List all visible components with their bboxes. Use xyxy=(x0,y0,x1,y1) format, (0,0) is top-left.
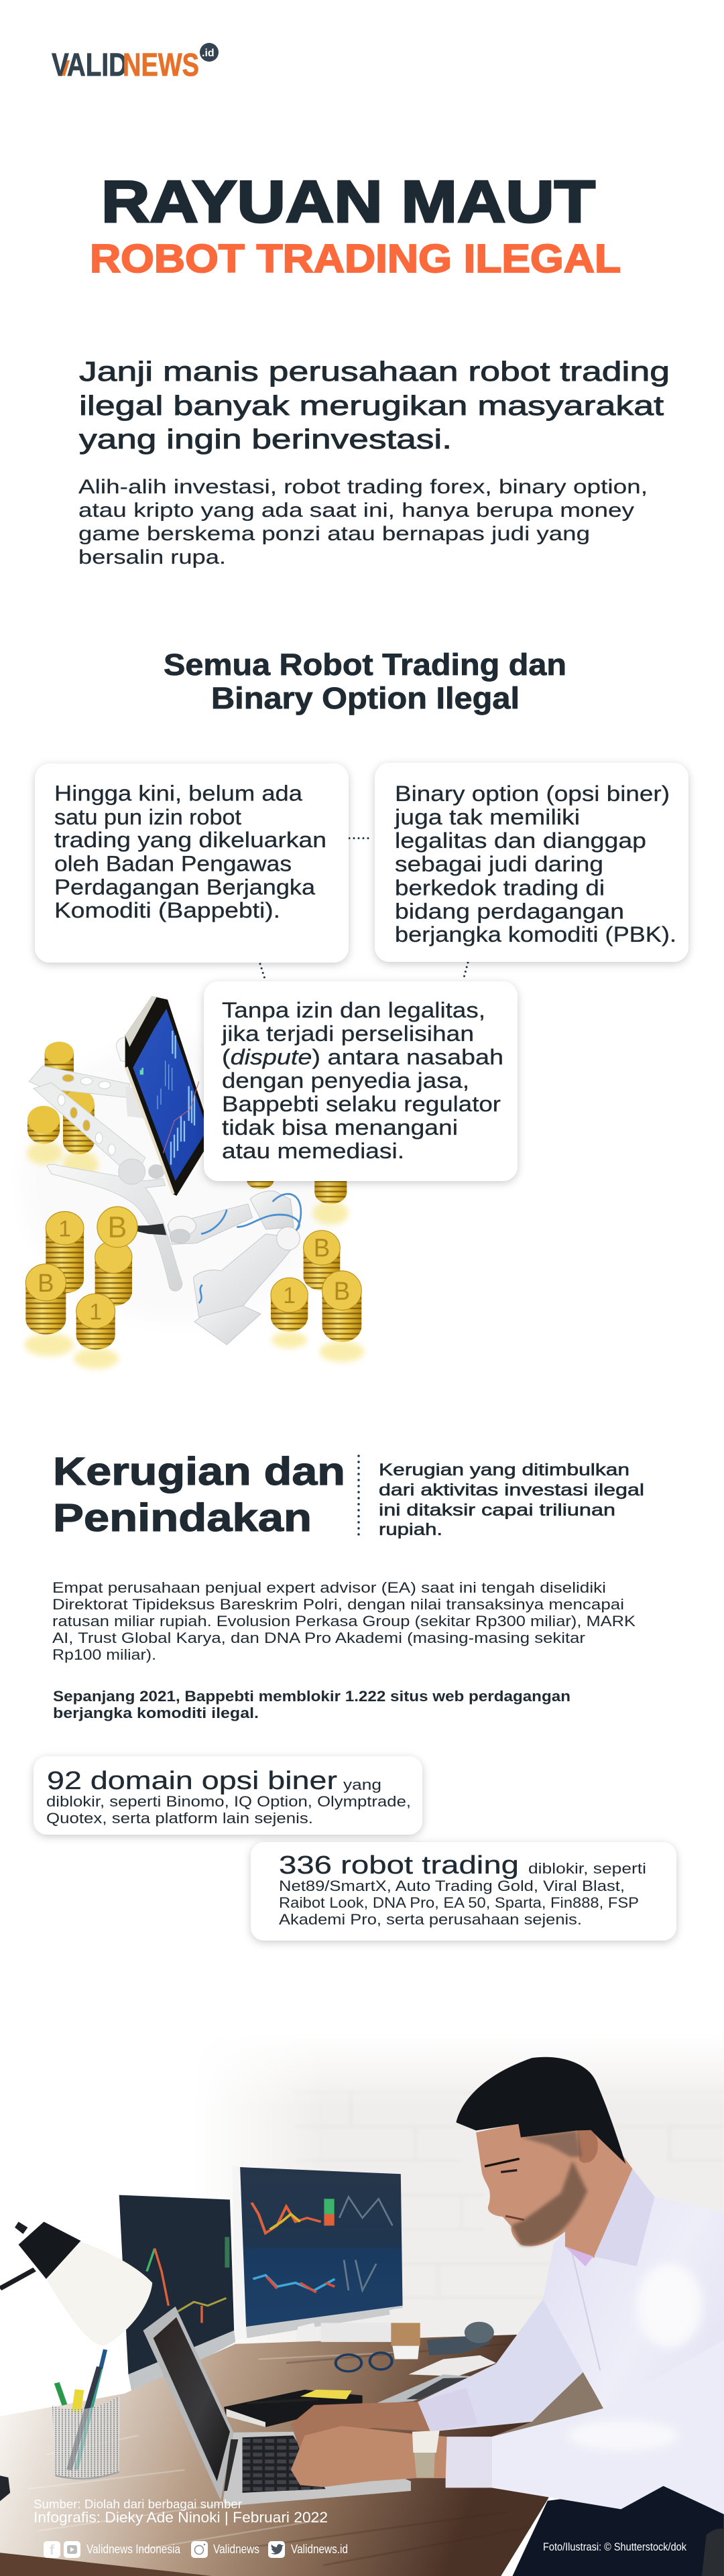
card: no legal dispute mediation: (dispute ) antara nasabah xyxy=(222,1045,503,1069)
coin stacks behind arm xyxy=(27,1042,347,1204)
small robot arm xyxy=(168,1191,300,1345)
card: no robot trading permit: Perdagangan Berjangka xyxy=(54,875,315,900)
man: shirt xyxy=(418,2168,724,2514)
intro paragraph: atau kripto yang ada saat ini, hanya berupa money xyxy=(78,499,634,522)
title: RAYUAN MAUT xyxy=(101,168,595,235)
investigation paragraph: Rp100 miliar). xyxy=(52,1646,156,1663)
desk lamp xyxy=(0,2221,152,2346)
man: hands and watch xyxy=(291,2402,447,2487)
card: 92 domains: 92 domain opsi biner xyxy=(47,1767,337,1795)
logo: Validnews.id: .id xyxy=(202,48,215,59)
losses summary: rupiah. xyxy=(379,1520,442,1539)
coin stacks in front: B xyxy=(38,1268,54,1297)
title xyxy=(90,168,621,281)
lead statement: ilegal banyak merugikan masyarakat xyxy=(79,390,664,421)
illustration: robot arm, tablet and coins xyxy=(20,996,364,1369)
card: no legal dispute mediation: dengan penyedia jasa, xyxy=(222,1068,469,1093)
section heading: illegal robots: Binary Option Ilegal xyxy=(211,681,520,715)
credits: Sumber: Diolah dari berbagai sumber xyxy=(34,2498,242,2511)
pen cup xyxy=(0,2349,120,2501)
icon: facebook and youtube: f xyxy=(50,2543,54,2558)
card: no robot trading permit: trading yang dikeluarkan xyxy=(54,828,326,852)
credits: Infografis: Dieky Ade Ninoki | Februari 2022 xyxy=(34,2509,328,2526)
social media row xyxy=(44,2541,348,2558)
card: no robot trading permit xyxy=(35,763,349,963)
card: no legal dispute mediation: Tanpa izin dan legalitas, xyxy=(222,998,485,1022)
losses summary: Kerugian yang ditimbulkan xyxy=(379,1461,629,1479)
tablet stand arm xyxy=(29,1037,182,1291)
card: no legal dispute mediation: jika terjadi perselisihan xyxy=(221,1022,474,1046)
tablet xyxy=(125,996,206,1196)
laptop xyxy=(143,2307,411,2506)
icon: instagram xyxy=(191,2541,208,2558)
card: binary option: juga tak memiliki xyxy=(394,805,580,829)
section heading: losses and enforcement: Penindakan xyxy=(53,1496,312,1540)
dotted connectors xyxy=(260,838,468,980)
coin stacks in front: B xyxy=(334,1276,350,1305)
coin stacks in front: B xyxy=(108,1211,127,1244)
lead statement: Janji manis perusahaan robot trading xyxy=(79,356,670,387)
logo: Validnews.id: VALID xyxy=(52,48,127,83)
bold statement: blocked sites xyxy=(53,1688,570,1721)
losses summary xyxy=(379,1461,644,1539)
intro paragraph: game berskema ponzi atau bernapas judi yang xyxy=(78,523,590,545)
photo: trader at desk xyxy=(0,1993,724,2576)
investigation paragraph: ratusan miliar rupiah. Evolusion Perkasa Group (sekitar Rp300 miliar), MARK xyxy=(52,1613,636,1630)
social media row: Validnews xyxy=(213,2542,259,2556)
left monitor xyxy=(119,2195,235,2425)
card: 336 robot trading: Net89/SmartX, Auto Trading Gold, Viral Blast, xyxy=(279,1878,625,1894)
card: 92 domains xyxy=(34,1756,422,1835)
card: no legal dispute mediation: atau memediasi. xyxy=(222,1139,404,1163)
section heading: illegal robots xyxy=(164,648,566,715)
man: collar xyxy=(565,2168,655,2266)
right monitor xyxy=(232,2165,403,2374)
card: 92 domains: Quotex, serta platform lain sejenis. xyxy=(46,1810,313,1827)
intro paragraph xyxy=(78,476,648,568)
card: 336 robot trading: Raibot Look, DNA Pro, EA 50, Sparta, Fin888, FSP xyxy=(279,1894,639,1911)
section heading: illegal robots: Semua Robot Trading dan xyxy=(164,648,566,682)
coin stacks in front xyxy=(25,1207,361,1349)
card: 336 robot trading xyxy=(251,1842,676,1941)
coin stacks in front: 1 xyxy=(89,1299,102,1325)
card: 336 robot trading: Akademi Pro, serta perusahaan sejenis. xyxy=(279,1911,582,1928)
card: binary option: berkedok trading di xyxy=(395,875,605,900)
coin stacks in front: 1 xyxy=(58,1216,71,1241)
card: binary option: sebagai judi daring xyxy=(395,852,603,876)
card: no legal dispute mediation: Bappebti selaku regulator xyxy=(222,1092,501,1116)
social media row: Validnews.id xyxy=(291,2542,348,2556)
logo: Validnews.id xyxy=(52,43,219,83)
logo: Validnews.id: NEWS xyxy=(123,48,199,83)
card: binary option: bidang perdagangan xyxy=(395,900,624,924)
card: no robot trading permit: satu pun izin robot xyxy=(54,805,241,829)
losses summary: ini ditaksir capai triliunan xyxy=(379,1501,615,1520)
coin stacks in front: 1 xyxy=(283,1283,296,1308)
photo credit: Foto/Ilustrasi: © Shutterstock/dok xyxy=(543,2540,686,2553)
man: head xyxy=(456,2057,633,2258)
card: no legal dispute mediation: tidak bisa menangani xyxy=(222,1115,458,1140)
desk xyxy=(0,2334,605,2576)
bold statement: blocked sites: Sepanjang 2021, Bappebti memblokir 1.222 situs web perdagangan xyxy=(53,1688,570,1705)
coin stacks in front: B xyxy=(314,1233,330,1262)
card: binary option xyxy=(375,763,688,962)
credits xyxy=(34,2498,328,2526)
losses summary: dari aktivitas investasi ilegal xyxy=(379,1481,644,1499)
intro paragraph: bersalin rupa. xyxy=(78,546,226,568)
section heading: losses and enforcement xyxy=(53,1450,345,1540)
card: 92 domains: yang xyxy=(343,1776,381,1793)
icon: facebook and youtube xyxy=(44,2541,80,2558)
card: 336 robot trading: diblokir, seperti xyxy=(528,1860,646,1877)
investigation paragraph xyxy=(52,1579,636,1663)
desk items xyxy=(224,2308,496,2427)
investigation paragraph: Empat perusahaan penjual expert advisor (EA) saat ini tengah diselidiki xyxy=(52,1579,606,1596)
intro paragraph: Alih-alih investasi, robot trading forex, binary option, xyxy=(78,476,648,498)
card: 336 robot trading: 336 robot trading xyxy=(279,1851,519,1880)
lead statement xyxy=(79,356,670,454)
bold statement: blocked sites: berjangka komoditi ilegal. xyxy=(53,1705,259,1721)
card: binary option: berjangka komoditi (PBK). xyxy=(395,922,676,946)
card: no robot trading permit: Hingga kini, belum ada xyxy=(54,782,302,806)
card: no robot trading permit: Komoditi (Bappebti). xyxy=(54,898,280,922)
title: ROBOT TRADING ILEGAL xyxy=(90,237,621,281)
investigation paragraph: AI, Trust Global Karya, dan DNA Pro Akademi (masing-masing sekitar xyxy=(52,1630,585,1646)
card: 92 domains: diblokir, seperti Binomo, IQ Option, Olymptrade, xyxy=(46,1793,411,1810)
man: trousers and chair xyxy=(512,2486,724,2576)
lead statement: yang ingin berinvestasi. xyxy=(79,424,452,454)
wall background xyxy=(0,1993,724,2497)
card: binary option: legalitas dan dianggap xyxy=(395,829,646,853)
card: binary option: Binary option (opsi biner) xyxy=(395,782,670,806)
social media row: Validnews Indonesia xyxy=(86,2542,181,2556)
investigation paragraph: Direktorat Tipideksus Bareskrim Polri, dengan nilai transaksinya mencapai xyxy=(52,1596,624,1613)
card: no legal dispute mediation xyxy=(204,981,518,1181)
icon: twitter xyxy=(268,2541,285,2558)
card: no robot trading permit: oleh Badan Pengawas xyxy=(54,851,292,875)
section heading: losses and enforcement: Kerugian dan xyxy=(53,1450,345,1493)
